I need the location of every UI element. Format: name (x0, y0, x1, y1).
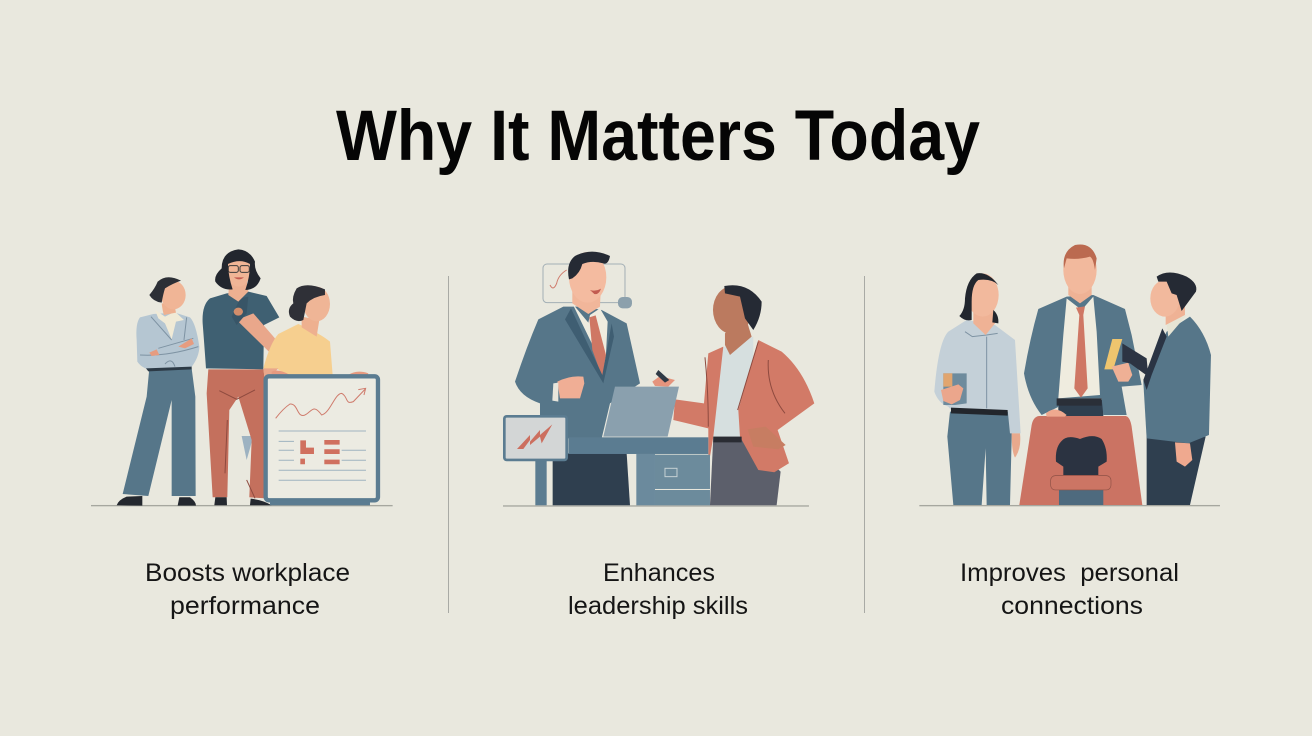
illustration: team with chart board (91, 249, 393, 506)
illustration: two colleagues at a desk (503, 252, 814, 507)
title: Why It Matters Today (336, 97, 980, 176)
man in coral blazer (652, 285, 814, 505)
man in blue suit (515, 252, 640, 505)
person: woman with crossed arms (117, 277, 199, 506)
person: left in light shirt (934, 273, 1021, 505)
caption: enhances leadership skills (568, 559, 748, 620)
caption: improves personal connections (960, 559, 1179, 620)
person: woman in yellow shirt (263, 285, 368, 382)
podium with chair (1019, 410, 1142, 505)
panel: workplace performance (91, 249, 393, 620)
speech bubble chart (543, 264, 632, 308)
caption: enhances leadership skills: leadership skills (568, 592, 748, 620)
caption: boosts workplace performance: Boosts workplace (145, 559, 350, 587)
caption: boosts workplace performance: performance (170, 592, 320, 620)
illustration: three colleagues with chair (919, 244, 1220, 506)
person: woman with glasses (203, 249, 279, 505)
caption: enhances leadership skills: Enhances (603, 559, 715, 587)
caption: improves personal connections: Improves personal (960, 559, 1179, 587)
person: center man in suit (1024, 244, 1142, 422)
person: right man profile (1122, 272, 1211, 505)
chart board (266, 376, 378, 505)
desk with laptop and cabinet (504, 387, 710, 505)
caption: improves personal connections: connections (1001, 592, 1143, 620)
caption: boosts workplace performance (145, 559, 350, 620)
panel: leadership skills (503, 252, 814, 620)
panel: personal connections (919, 244, 1220, 620)
